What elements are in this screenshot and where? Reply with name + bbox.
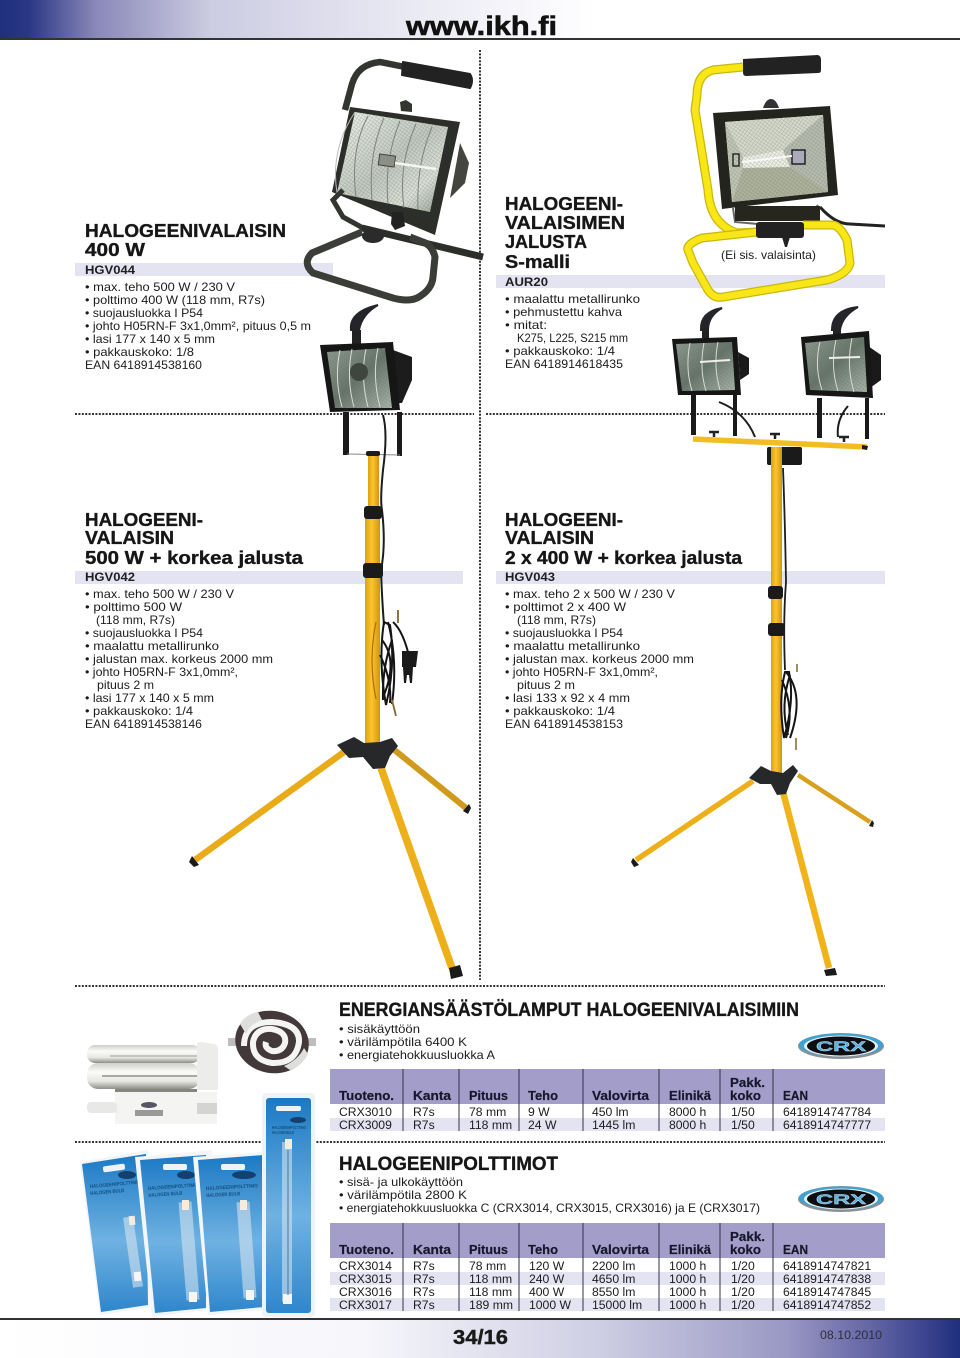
table: energy saving lamps: 24 W [528,1118,557,1132]
table: halogen bulbs: R7s [413,1285,435,1299]
table: halogen bulbs: 6418914747845 [783,1285,871,1299]
specification list HGV044: • polttimo 400 W (118 mm, R7s) [85,293,265,307]
specification list HGV042: • max. teho 500 W / 230 V [85,587,234,601]
product title: stand S-malli: S-malli [505,252,570,272]
product code HGV043: HGV043 [505,570,555,584]
table: halogen bulbs: R7s [413,1298,435,1312]
image: blister pack 4 long bulb: HALOGEENIPOLTTIMO [272,1125,306,1130]
specification list HGV042: • maalattu metallirunko [85,639,219,653]
specification list HGV043: • lasi 133 x 92 x 4 mm [505,691,630,705]
specification list AUR20: EAN 6418914618435 [505,357,623,371]
table: energy saving lamps: 1/50 [731,1118,755,1132]
logo: CRX bottom: CRX [816,1191,867,1207]
bullet list: energy saving lamps [339,1022,495,1062]
table: halogen bulbs: Teho [528,1243,558,1257]
table: energy saving lamps: 6418914747777 [783,1118,871,1132]
image: blister pack 2 [135,1150,212,1317]
specification list HGV043: • johto H05RN-F 3x1,0mm², [505,665,658,679]
product image: floodlight on tall tripod HGV042 [189,305,471,979]
specification list HGV042: (118 mm, R7s) [96,613,175,627]
bullet list: energy saving lamps: • energiatehokkuusluokka A [339,1048,495,1062]
image: blister pack 4 long bulb: HALOGEN BULB [272,1130,294,1135]
table: halogen bulbs: Pakk. [730,1230,765,1244]
table: energy saving lamps: 8000 h [669,1118,706,1132]
table: halogen bulbs: EAN [783,1243,808,1257]
table: halogen bulbs: 1/20 [731,1259,755,1273]
product title: HGV043: HALOGEENI- [505,510,623,530]
specification list HGV044: EAN 6418914538160 [85,358,202,372]
logo: CRX bottom [798,1186,884,1212]
table: energy saving lamps: EAN [783,1089,808,1103]
specification list HGV043: • maalattu metallirunko [505,639,640,653]
table: halogen bulbs: 189 mm [469,1298,513,1312]
specification list HGV043 [505,587,694,731]
table: halogen bulbs: 240 W [529,1272,565,1286]
table: halogen bulbs: 1000 W [529,1298,571,1312]
bullet list: energy saving lamps: • värilämpötila 6400 K [339,1035,467,1049]
table: energy saving lamps: 6418914747784 [783,1105,871,1119]
product title: HGV043 [505,510,743,568]
table: energy saving lamps [330,1069,885,1132]
table: halogen bulbs: 1000 h [669,1285,706,1299]
table: halogen bulbs: R7s [413,1259,435,1273]
product code AUR20: AUR20 [505,275,548,289]
bullet list: halogen bulbs: • sisä- ja ulkokäyttöön [339,1175,463,1189]
table: energy saving lamps: 118 mm [469,1118,512,1132]
table: halogen bulbs: 1000 h [669,1298,706,1312]
image: blister pack 2: HALOGEN BULB [148,1191,183,1199]
bullet list: halogen bulbs [339,1175,760,1215]
table: energy saving lamps: CRX3009 [339,1118,392,1132]
table: halogen bulbs: 400 W [529,1285,565,1299]
product title: HGV042: 500 W + korkea jalusta [85,548,304,568]
product title: HALOGEENIVALAISIN 400 W: 400 W [85,240,145,260]
specification list HGV043: (118 mm, R7s) [517,613,596,627]
image: blister pack 1 [80,1150,150,1315]
table: energy saving lamps: koko [730,1089,761,1103]
page number: 34/16 [453,1327,508,1349]
specification list HGV044: • lasi 177 x 140 x 5 mm [85,332,215,346]
specification list HGV042: pituus 2 m [97,678,154,692]
product title: HALOGEENIVALAISIN 400 W: HALOGEENIVALAISIN [85,221,286,241]
table: halogen bulbs: 4650 lm [592,1272,635,1286]
table: energy saving lamps: 1445 lm [592,1118,635,1132]
product title: HGV043: 2 x 400 W + korkea jalusta [505,548,743,568]
table: halogen bulbs: koko [730,1243,761,1257]
specification list HGV043: • pakkauskoko: 1/4 [505,704,615,718]
specification list HGV042: • johto H05RN-F 3x1,0mm², [85,665,238,679]
table: energy saving lamps: Pituus [469,1089,508,1103]
specification list HGV043: • max. teho 2 x 500 W / 230 V [505,587,675,601]
bullet list: halogen bulbs: • värilämpötila 2800 K [339,1188,467,1202]
specification list HGV044: • max. teho 500 W / 230 V [85,280,235,294]
specification list HGV044 [85,280,311,372]
image: blister pack 4 long bulb [262,1093,315,1317]
specification list AUR20: • pakkauskoko: 1/4 [505,344,615,358]
image: blister pack 3: HALOGEN BULB [206,1191,241,1199]
table: energy saving lamps: 78 mm [469,1105,506,1119]
table: halogen bulbs: Pituus [469,1243,508,1257]
image: blister pack 3 [193,1152,264,1315]
table: halogen bulbs: 1/20 [731,1298,755,1312]
table: halogen bulbs: 118 mm [469,1285,512,1299]
product title: HGV042: VALAISIN [85,528,174,548]
table: halogen bulbs: CRX3016 [339,1285,392,1299]
table: energy saving lamps: Elinikä [669,1089,711,1103]
table: halogen bulbs: 6418914747852 [783,1298,871,1312]
table: halogen bulbs: 1000 h [669,1259,706,1273]
table: halogen bulbs: 8550 lm [592,1285,635,1299]
specification list HGV042 [85,587,273,731]
specification list HGV043: • jalustan max. korkeus 2000 mm [505,652,694,666]
product title: HALOGEENIVALAISIN 400 W [85,221,286,260]
specification list HGV044: • suojausluokka I P54 [85,306,203,320]
specification list HGV044: • johto H05RN-F 3x1,0mm², pituus 0,5 m [85,319,311,333]
table: energy saving lamps: Tuoteno. [339,1089,394,1103]
lavender code strips [75,263,885,584]
table: energy saving lamps: 450 lm [592,1105,629,1119]
table: halogen bulbs: 120 W [529,1259,565,1273]
table: halogen bulbs: 2200 lm [592,1259,635,1273]
table: halogen bulbs [330,1223,885,1312]
table: halogen bulbs: 6418914747838 [783,1272,871,1286]
logo: CRX top: CRX [816,1038,867,1054]
image: twin-tube energy saving lamp [87,1042,218,1124]
product title: HGV042 [85,510,304,568]
product title: HGV042: HALOGEENI- [85,510,203,530]
table: halogen bulbs: CRX3015 [339,1272,392,1286]
specification list HGV042: • jalustan max. korkeus 2000 mm [85,652,273,666]
table: energy saving lamps: Teho [528,1089,558,1103]
table: energy saving lamps: Pakk. [730,1076,765,1090]
specification list HGV042: • suojausluokka I P54 [85,626,203,640]
table: halogen bulbs: 78 mm [469,1259,506,1273]
specification list AUR20 [505,292,640,371]
table: energy saving lamps: 1/50 [731,1105,755,1119]
specification list HGV044: • pakkauskoko: 1/8 [85,345,194,359]
specification list HGV043: • polttimot 2 x 400 W [505,600,627,614]
footer band [0,1318,960,1358]
logo: CRX top [798,1033,884,1059]
table: halogen bulbs: Elinikä [669,1243,711,1257]
section heading: halogen bulbs: HALOGEENIPOLTTIMOT [339,1154,558,1175]
product code HGV042: HGV042 [85,570,135,584]
table: halogen bulbs: 15000 lm [592,1298,642,1312]
specification list HGV043: • suojausluokka I P54 [505,626,623,640]
product title: stand S-malli: HALOGEENI- [505,194,623,214]
image: blister pack 2: HALOGEENIPOLTTIMO [148,1183,198,1192]
specification list AUR20: • mitat: [505,318,547,332]
table: energy saving lamps: R7s [413,1118,435,1132]
table: halogen bulbs: R7s [413,1272,435,1286]
table: halogen bulbs: 6418914747821 [783,1259,871,1273]
specification list HGV043: EAN 6418914538153 [505,717,623,731]
table: energy saving lamps: R7s [413,1105,435,1119]
image: blister pack 3: HALOGEENIPOLTTIMO [206,1183,258,1192]
table: halogen bulbs: Kanta [413,1243,452,1257]
image: blister pack 1: HALOGEN BULB [90,1188,125,1197]
specification list HGV043: pituus 2 m [517,678,575,692]
note: lamp not included: (Ei sis. valaisinta) [721,248,816,262]
product image: twin floodlights on tall tripod HGV043 [631,307,881,976]
bullet list: energy saving lamps: • sisäkäyttöön [339,1022,420,1036]
product image: black floodlight HGV044 [307,62,483,300]
bullet list: halogen bulbs: • energiatehokkuusluokka C (CRX3014, CRX3015, CRX3016) ja E (CRX3017) [339,1201,760,1215]
specification list AUR20: K275, L225, S215 mm [517,331,628,345]
specification list HGV042: • lasi 177 x 140 x 5 mm [85,691,214,705]
product title: stand S-malli: VALAISIMEN [505,213,625,233]
table: energy saving lamps: 9 W [528,1105,550,1119]
specification list AUR20: • maalattu metallirunko [505,292,640,306]
table: halogen bulbs: CRX3014 [339,1259,392,1273]
section heading: energy saving lamps: ENERGIANSÄÄSTÖLAMPUT HALOGEENIVALAISIMIIN [339,1000,799,1021]
header band [0,0,960,40]
product title: stand S-malli: JALUSTA [505,232,587,252]
website address: www.ikh.fi [405,11,557,41]
table: halogen bulbs: 118 mm [469,1272,512,1286]
table: halogen bulbs: CRX3017 [339,1298,392,1312]
table: energy saving lamps: CRX3010 [339,1105,392,1119]
image: blister pack 1: HALOGEENIPOLTTIMO [89,1180,140,1190]
table: halogen bulbs: 1/20 [731,1285,755,1299]
specification list HGV042: • pakkauskoko: 1/4 [85,704,193,718]
table: halogen bulbs: Tuoteno. [339,1243,394,1257]
product title: stand S-malli [505,194,625,272]
table: energy saving lamps: Valovirta [592,1089,650,1103]
product title: HGV043: VALAISIN [505,528,594,548]
specification list HGV042: EAN 6418914538146 [85,717,202,731]
image: spiral energy saving lamp [228,1004,316,1080]
table: halogen bulbs: 1/20 [731,1272,755,1286]
specification list AUR20: • pehmustettu kahva [505,305,622,319]
product code HGV044: HGV044 [85,263,135,277]
date: 08.10.2010 [820,1328,882,1342]
specification list HGV042: • polttimo 500 W [85,600,183,614]
table: energy saving lamps: 8000 h [669,1105,706,1119]
product image: yellow stand with floodlight AUR20 [688,55,885,297]
table: energy saving lamps: Kanta [413,1089,452,1103]
table: halogen bulbs: Valovirta [592,1243,650,1257]
table: halogen bulbs: 1000 h [669,1272,706,1286]
